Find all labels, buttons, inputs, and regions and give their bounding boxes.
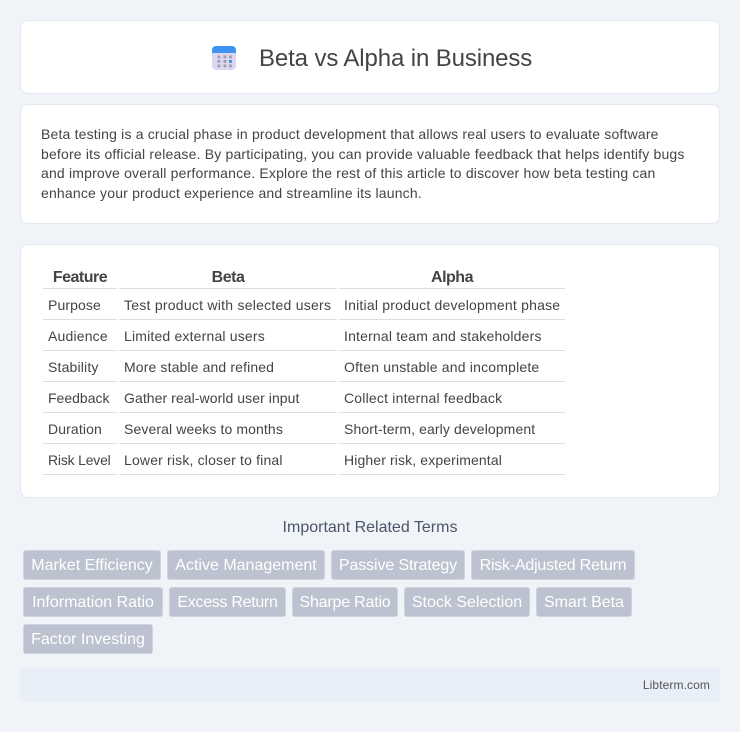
footer bar [20,668,720,702]
comparison table: Gather real-world user input [124,390,299,406]
related terms tags: Factor Investing [31,631,145,648]
comparison table: Lower risk, closer to final [124,452,283,468]
comparison table [43,269,565,475]
comparison table: Feature [53,269,107,286]
intro paragraph: and improve overall performance. Explore the rest of this article to discover how beta testing can [41,165,656,181]
intro text panel [20,104,720,224]
comparison table: Higher risk, experimental [344,452,502,468]
comparison table: Audience [48,328,108,344]
related terms tags: Information Ratio [32,594,154,611]
comparison table: Feedback [48,390,109,406]
comparison table: Alpha [431,269,473,286]
related terms tags: Risk-Adjusted Return [480,557,626,574]
related terms tags: Sharpe Ratio [300,594,390,611]
comparison table: Internal team and stakeholders [344,328,542,344]
related terms tags: Active Management [175,557,317,574]
comparison table: Beta [212,269,244,286]
comparison table: Initial product development phase [344,297,560,313]
comparison table: Often unstable and incomplete [344,359,539,375]
intro paragraph: Beta testing is a crucial phase in product development that allows real users to evaluate software [41,126,659,142]
comparison table: Test product with selected users [124,297,331,313]
icon: calendar [212,46,236,70]
related terms heading: Important Related Terms [283,519,457,536]
comparison table: Short-term, early development [344,421,535,437]
comparison table: More stable and refined [124,359,274,375]
intro paragraph: enhance your product experience and streamline its launch. [41,184,422,200]
related terms tags: Smart Beta [544,594,624,611]
header panel [20,20,720,94]
comparison table: Purpose [48,297,101,313]
related terms tags: Passive Strategy [339,557,457,574]
title: Beta vs Alpha in Business [259,45,532,72]
comparison table: Risk Level [48,452,111,468]
comparison table: Several weeks to months [124,421,283,437]
comparison table: Stability [48,359,99,375]
comparison table panel [20,244,720,498]
comparison table: Duration [48,421,102,437]
related terms tags: Stock Selection [412,594,522,611]
related terms tags [23,550,635,654]
related terms tags: Excess Return [177,594,278,611]
intro paragraph [41,126,685,201]
intro paragraph: before its official release. By participating, you can provide valuable feedback that helps identify bugs [41,146,685,162]
comparison table: Limited external users [124,328,265,344]
comparison table: Collect internal feedback [344,390,502,406]
footer credit: Libterm.com [643,678,710,692]
related terms tags: Market Efficiency [31,557,153,574]
